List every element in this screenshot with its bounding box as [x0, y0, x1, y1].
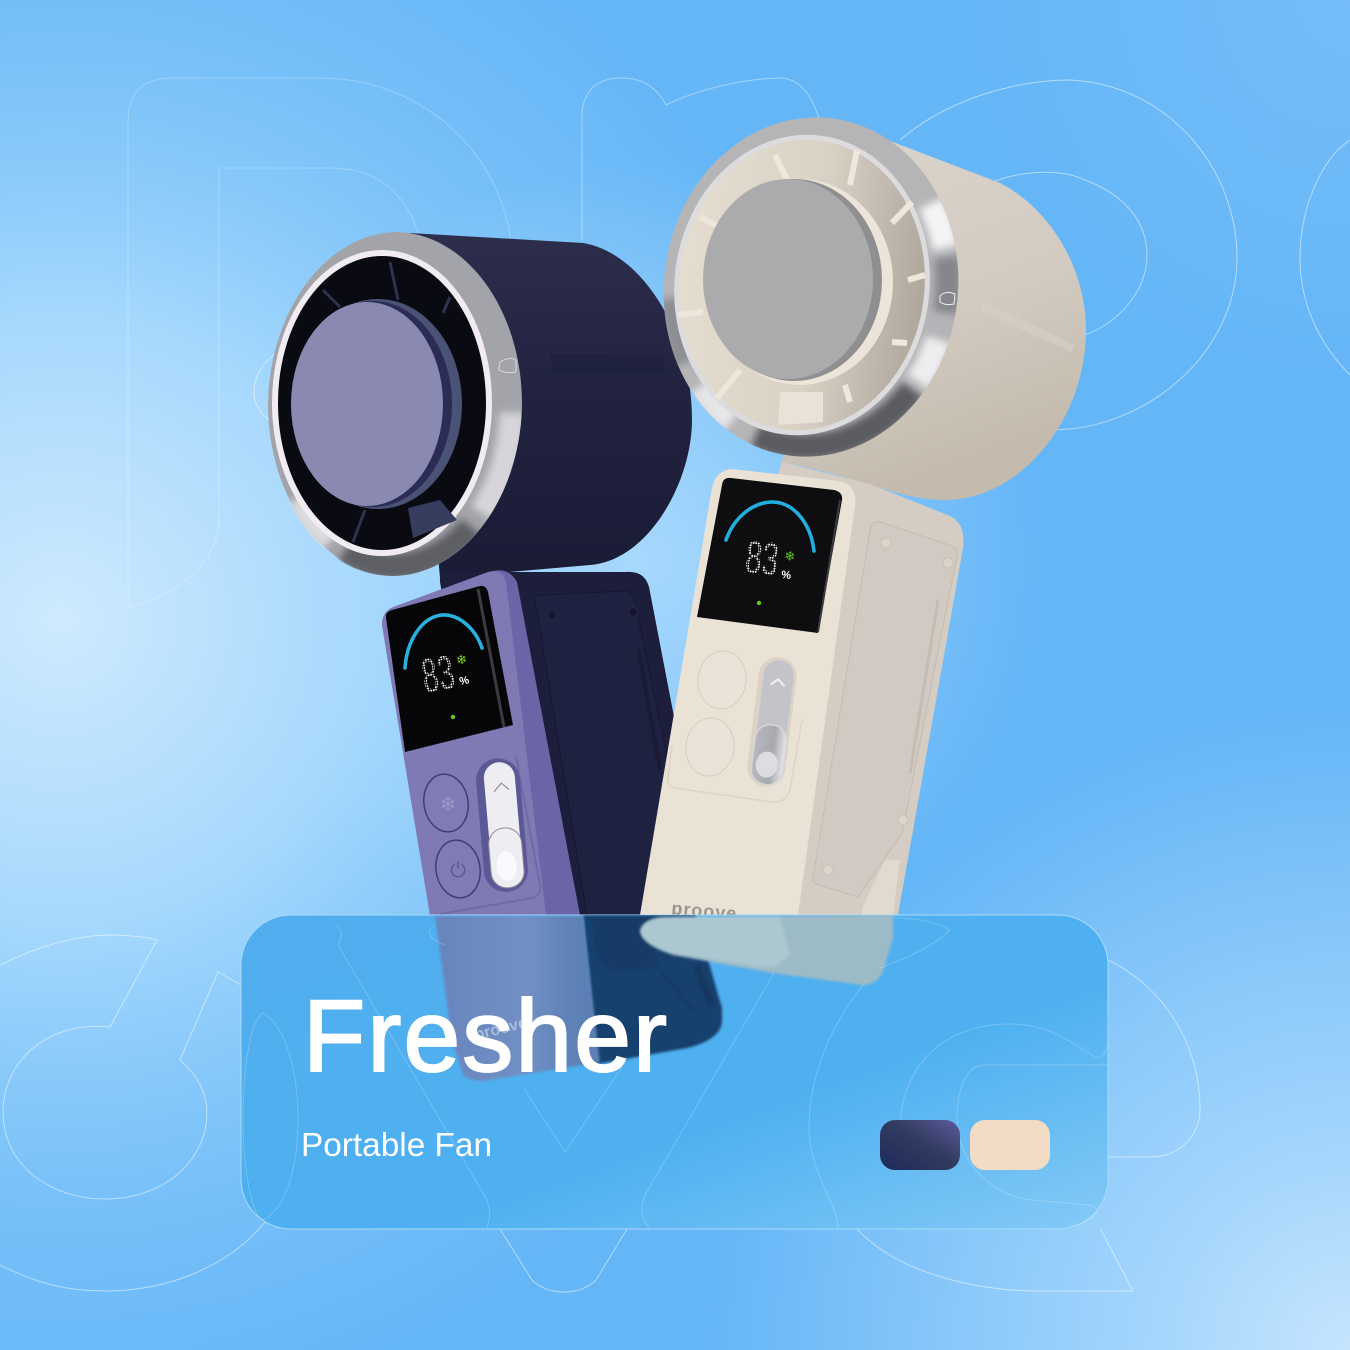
- navy fan barrel: [410, 233, 692, 578]
- control panel outline: [440, 756, 540, 914]
- title: Fresher: [303, 979, 667, 1093]
- navy fan body back: [440, 572, 690, 915]
- battery arc: [726, 502, 814, 551]
- reflection of products in the card: [435, 915, 893, 1081]
- beige fan silver ring: [664, 118, 958, 457]
- barrel seam: [550, 354, 665, 372]
- percent sign: %: [781, 569, 792, 582]
- slider switch: [748, 658, 796, 786]
- battery reading: 83: [418, 646, 458, 704]
- colour swatch: navy: [880, 1120, 960, 1170]
- brand wordmark: proove: [671, 898, 738, 924]
- beige screen: [697, 478, 842, 633]
- snowflake indicator: ❄: [784, 549, 796, 565]
- glass card: [241, 915, 1108, 1229]
- reflected logo: proove: [473, 1014, 529, 1044]
- power button: ⏻: [450, 858, 466, 882]
- cooling button: [423, 773, 469, 833]
- fan hub disc: [291, 302, 443, 506]
- percent sign: %: [458, 674, 470, 688]
- beige side panel: [813, 522, 957, 915]
- battery reading: 83: [743, 530, 781, 585]
- control panel outline: [668, 720, 802, 802]
- colour swatch: beige: [970, 1120, 1050, 1170]
- silver ring clip notch: [940, 292, 955, 305]
- beige fan reflection: [640, 915, 893, 985]
- letterform outlines through the card: [243, 918, 1108, 1228]
- slider switch: [474, 757, 530, 894]
- barrel seam: [1067, 346, 1074, 352]
- beige fan barrel: [782, 118, 1086, 500]
- status dot: [451, 715, 455, 719]
- silver ring clip notch: [499, 358, 516, 373]
- lavender screen: [386, 586, 513, 752]
- cooling button: ❄: [440, 792, 456, 816]
- navy fan reflection: [583, 915, 722, 1064]
- fan hub disc: [703, 179, 873, 379]
- product: navy portable fan: [268, 232, 692, 915]
- lavender fan reflection: [435, 916, 600, 1081]
- beige body shell: [640, 462, 963, 924]
- power button: [435, 839, 481, 899]
- navy fan intake: [275, 253, 489, 553]
- battery arc: [405, 615, 482, 668]
- status dot: [757, 601, 761, 605]
- power button: [686, 718, 734, 776]
- navy body side panel: [535, 591, 668, 915]
- navy fan silver ring: [268, 232, 522, 576]
- product: beige portable fan: [640, 100, 1086, 924]
- snowflake indicator: ❄: [455, 652, 468, 669]
- subtitle: Portable Fan: [301, 1126, 492, 1163]
- cooling button: [698, 650, 746, 710]
- lavender front shell: [382, 570, 580, 915]
- beige fan intake: [674, 134, 930, 436]
